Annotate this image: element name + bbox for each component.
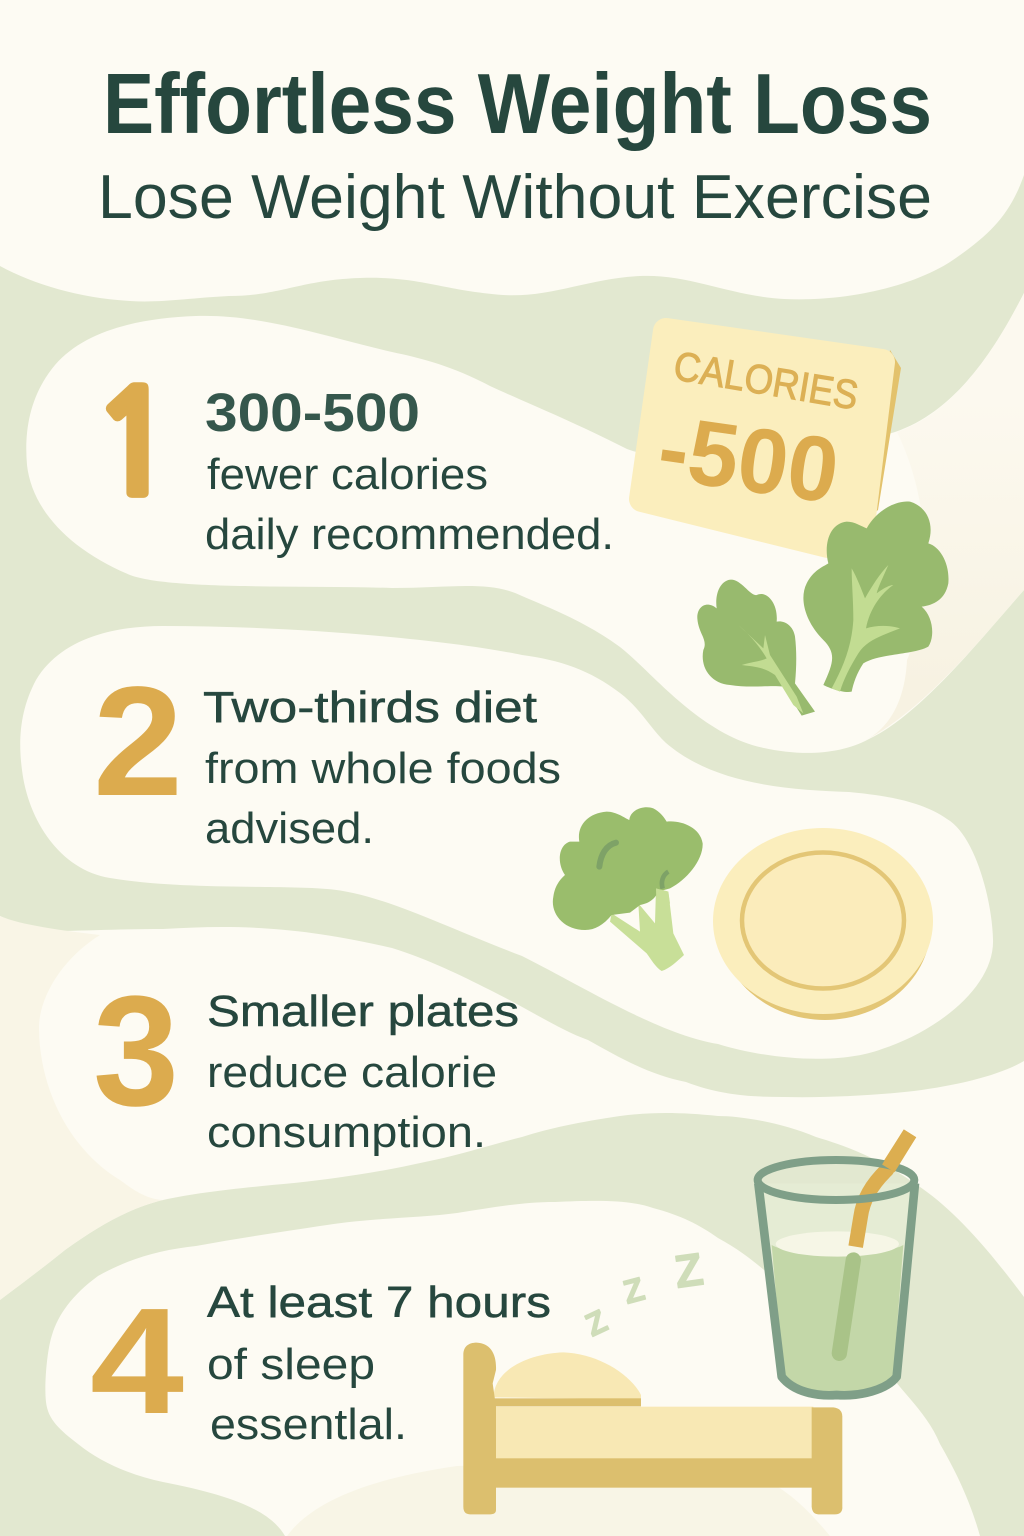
icon: plate	[713, 828, 933, 1020]
step 1	[91, 375, 614, 559]
icon: broccoli	[553, 807, 703, 971]
step 2 text: advised.	[205, 804, 374, 853]
number 4: 4	[90, 1276, 184, 1445]
step 4	[90, 1276, 551, 1449]
step 4 text: At least 7 hours	[207, 1278, 551, 1327]
step 2 text: Two-thirds diet	[203, 683, 537, 732]
number 2: 2	[93, 655, 183, 829]
icon: calories card: -500	[652, 397, 845, 523]
step 3 text: reduce calorie	[207, 1048, 497, 1097]
icon: sleep z letters: Z	[671, 1242, 706, 1298]
step 1 text: 300-500	[205, 383, 420, 443]
icon: calories card	[642, 331, 901, 545]
step 3 text: Smaller plates	[207, 987, 519, 1036]
step 3 text: consumption.	[207, 1108, 486, 1157]
step 4 text: of sleep	[207, 1340, 375, 1389]
number 1: 1	[91, 375, 178, 516]
icon: bed	[463, 1343, 842, 1514]
title: Effortless Weight Loss	[103, 57, 932, 152]
subtitle: Lose Weight Without Exercise	[98, 163, 932, 232]
step 2 text	[203, 683, 561, 853]
icon: glass with straw	[758, 1133, 915, 1397]
step 1 text: daily recommended.	[205, 510, 614, 559]
icon: calories card: CALORIES	[671, 343, 862, 419]
step 3	[93, 964, 519, 1157]
icon: sleep z letters: Z	[580, 1302, 613, 1343]
step 4 text: essentlal.	[210, 1400, 407, 1449]
icon: leafy greens	[697, 501, 949, 716]
number 3: 3	[93, 964, 179, 1139]
step 1 text: fewer calories	[207, 450, 488, 499]
icon: sleep z letters: Z	[619, 1270, 648, 1311]
step 1 text	[205, 383, 614, 559]
step 3 text	[207, 987, 519, 1157]
icon: sleep z letters	[580, 1242, 706, 1343]
step 2	[93, 655, 561, 853]
step 4 text	[207, 1278, 551, 1449]
step 2 text: from whole foods	[205, 744, 561, 793]
